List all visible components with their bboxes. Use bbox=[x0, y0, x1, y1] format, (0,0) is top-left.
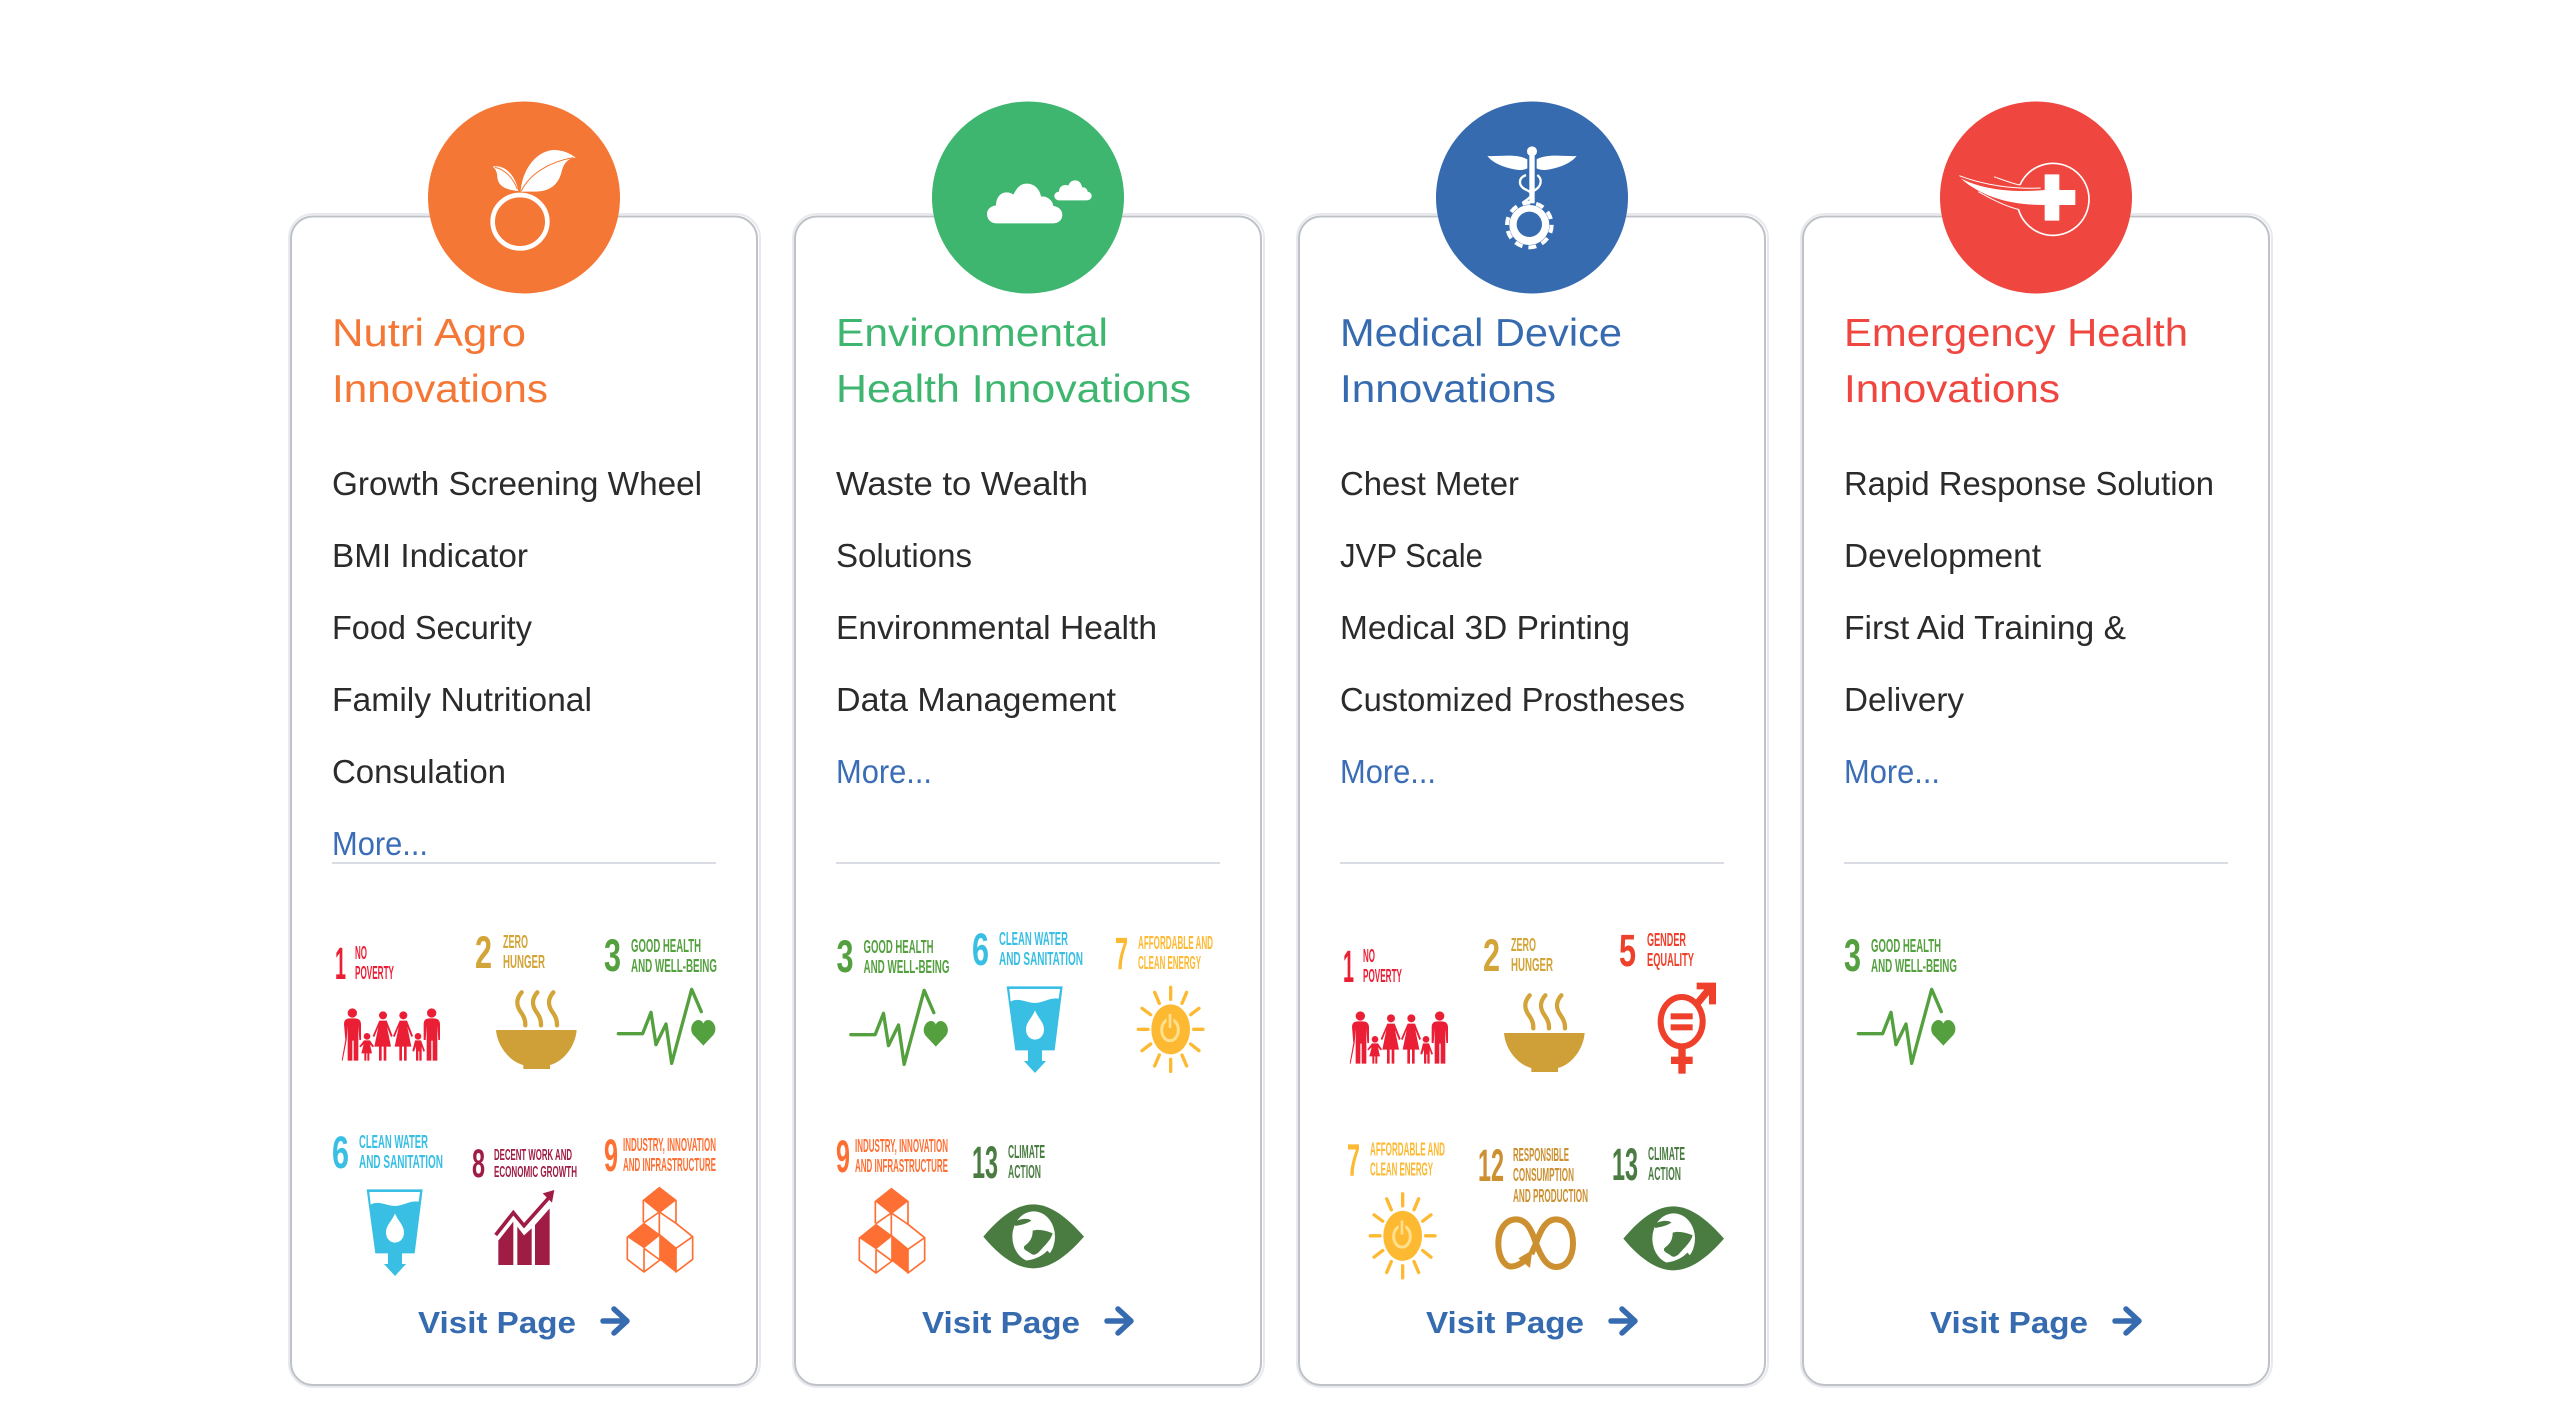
goal: 6 clean water: 6 bbox=[972, 924, 989, 975]
icon: medical cross bbox=[1940, 102, 2132, 294]
link: visit page: Visit Page bbox=[1426, 1305, 1584, 1340]
goal: 1 no poverty: 1 bbox=[335, 938, 346, 989]
goal: 3 good health: GOOD HEALTH bbox=[631, 936, 701, 956]
panel: Medical Device Innovations: AND PRODUCTION bbox=[1513, 1186, 1588, 1206]
text block: items: Growth Screening Wheel bbox=[332, 465, 702, 502]
goal: 12 responsible consumption: 12 bbox=[1478, 1140, 1504, 1191]
goal: 3 good health: 3 bbox=[604, 930, 621, 981]
goal: 3 good health bbox=[604, 930, 717, 1063]
link: visit page: Visit Page bbox=[922, 1305, 1080, 1340]
goal: 5 gender equality bbox=[1619, 925, 1716, 1074]
text block: items: Waste to Wealth bbox=[836, 465, 1088, 502]
text block: items: Solutions bbox=[836, 537, 972, 574]
goal: 3 good health: AND WELL-BEING bbox=[631, 956, 717, 976]
panel: Environmental Health Innovations: AND INFRASTRUCTURE bbox=[855, 1156, 948, 1176]
goal: 2 zero hunger bbox=[1483, 930, 1585, 1072]
goal: 3 good health bbox=[836, 931, 950, 1064]
goal: 9 industry: 9 bbox=[836, 1131, 850, 1182]
panel: Emergency Health Innovations bbox=[1801, 102, 2272, 1387]
goal: 6 clean water: AND SANITATION bbox=[999, 949, 1083, 969]
goal: 3 good health: GOOD HEALTH bbox=[1871, 936, 1941, 956]
goal: 12 responsible consumption bbox=[1478, 1140, 1588, 1268]
panel: Environmental Health Innovations bbox=[793, 102, 1264, 1387]
link: more: More... bbox=[836, 753, 932, 790]
text block: items: Consulation bbox=[332, 753, 506, 790]
goal: 9 industry bbox=[604, 1130, 716, 1273]
heading: Innovations bbox=[1844, 368, 2060, 411]
goal: 8 decent work: DECENT WORK AND bbox=[494, 1147, 572, 1164]
panel: Nutri Agro Innovations bbox=[289, 102, 760, 1387]
goal: 3 good health: GOOD HEALTH bbox=[864, 937, 934, 957]
icon: leaf fruit bbox=[428, 102, 620, 294]
goal: 6 clean water: CLEAN WATER bbox=[359, 1132, 428, 1152]
text block: items bbox=[1844, 465, 2214, 718]
goal: 1 no poverty: NO bbox=[355, 943, 367, 963]
link: more: More... bbox=[1844, 753, 1940, 790]
goal: 6 clean water: CLEAN WATER bbox=[999, 929, 1068, 949]
text block: items: Development bbox=[1844, 537, 2041, 574]
goal: 6 clean water bbox=[332, 1127, 443, 1276]
link: more: More... bbox=[1340, 753, 1436, 790]
goal: 8 decent work: 8 bbox=[472, 1142, 485, 1186]
text block: items: Family Nutritional bbox=[332, 681, 592, 718]
goal: 13 climate action: CLIMATE bbox=[1008, 1142, 1045, 1162]
link: visit page: Visit Page bbox=[1930, 1305, 2088, 1340]
heading: Emergency Health bbox=[1844, 312, 2188, 355]
arrow bbox=[1107, 1309, 1131, 1333]
heading bbox=[332, 312, 548, 411]
link: visit page: Visit Page bbox=[418, 1305, 576, 1340]
goal: 1 no poverty: 1 bbox=[1343, 941, 1354, 992]
goal: 1 no poverty: POVERTY bbox=[355, 963, 394, 983]
heading bbox=[1340, 312, 1622, 411]
goal: 2 zero hunger: ZERO bbox=[1511, 935, 1536, 955]
goal: 3 good health: 3 bbox=[1844, 930, 1861, 981]
text block: items: JVP Scale bbox=[1340, 537, 1483, 574]
text block: items: Customized Prostheses bbox=[1340, 681, 1685, 718]
goal: 13 climate action: CLIMATE bbox=[1648, 1144, 1685, 1164]
heading: Environmental bbox=[836, 312, 1108, 355]
icon: caduceus gear bbox=[1436, 102, 1628, 294]
goal: 13 climate action: 13 bbox=[972, 1137, 998, 1188]
goal: 13 climate action: ACTION bbox=[1648, 1164, 1681, 1184]
goal: 13 climate action: ACTION bbox=[1008, 1162, 1041, 1182]
heading: Innovations bbox=[1340, 368, 1556, 411]
goal: 3 good health: AND WELL-BEING bbox=[864, 957, 950, 977]
goal: 13 climate action bbox=[1612, 1139, 1724, 1270]
goal: 2 zero hunger: ZERO bbox=[503, 932, 528, 952]
goal: 6 clean water: AND SANITATION bbox=[359, 1152, 443, 1172]
goal: 1 no poverty: POVERTY bbox=[1363, 966, 1402, 986]
text block: items bbox=[332, 465, 702, 790]
goal: 2 zero hunger bbox=[475, 927, 577, 1069]
heading: Health Innovations bbox=[836, 368, 1191, 411]
goal: 7 affordable energy: 7 bbox=[1347, 1134, 1360, 1186]
goal: 6 clean water bbox=[972, 924, 1083, 1073]
goal: 3 good health bbox=[1844, 930, 1957, 1063]
text block: items: Chest Meter bbox=[1340, 465, 1519, 502]
panel: Medical Device Innovations bbox=[1297, 102, 1768, 1387]
goal: 12 responsible consumption: CONSUMPTION bbox=[1513, 1165, 1574, 1185]
panel: Environmental Health Innovations: AFFORDABLE AND bbox=[1138, 933, 1213, 953]
text block: items: Environmental Health bbox=[836, 609, 1157, 646]
arrow bbox=[2115, 1309, 2139, 1333]
arrow bbox=[603, 1309, 627, 1333]
text block: items: BMI Indicator bbox=[332, 537, 528, 574]
text block: items: Medical 3D Printing bbox=[1340, 609, 1630, 646]
goal: 7 affordable energy: CLEAN ENERGY bbox=[1138, 953, 1201, 973]
goal: 9 industry bbox=[836, 1131, 948, 1274]
goal: 7 affordable energy bbox=[1115, 928, 1213, 1071]
text block: items: First Aid Training & bbox=[1844, 609, 2126, 646]
panel: Nutri Agro Innovations: AND INFRASTRUCTURE bbox=[623, 1155, 716, 1175]
goal: 8 decent work bbox=[472, 1142, 577, 1265]
goal: 5 gender equality: GENDER bbox=[1647, 930, 1686, 950]
text block: items bbox=[836, 465, 1157, 718]
goal: 1 no poverty: NO bbox=[1363, 946, 1375, 966]
goal: 6 clean water: 6 bbox=[332, 1127, 349, 1178]
panel: Medical Device Innovations: AFFORDABLE AND bbox=[1370, 1140, 1445, 1160]
icon: clouds bbox=[932, 102, 1124, 294]
goal: 5 gender equality: EQUALITY bbox=[1647, 950, 1694, 970]
goal: 1 no poverty bbox=[1343, 941, 1448, 1064]
goal: 3 good health: AND WELL-BEING bbox=[1871, 956, 1957, 976]
heading: Medical Device bbox=[1340, 312, 1622, 355]
link: more: More... bbox=[332, 825, 428, 862]
heading: Innovations bbox=[332, 368, 548, 411]
goal: 7 affordable energy: CLEAN ENERGY bbox=[1370, 1160, 1433, 1180]
goal: 2 zero hunger: HUNGER bbox=[503, 952, 545, 972]
heading bbox=[1844, 312, 2188, 411]
text block: items: Data Management bbox=[836, 681, 1116, 718]
goal: 2 zero hunger: 2 bbox=[475, 927, 492, 978]
goal: 9 industry: 9 bbox=[604, 1130, 618, 1181]
goal: 5 gender equality: 5 bbox=[1619, 925, 1636, 976]
goal: 7 affordable energy: 7 bbox=[1115, 928, 1128, 979]
heading: Nutri Agro bbox=[332, 312, 526, 355]
text block: items bbox=[1340, 465, 1685, 718]
text block: items: Rapid Response Solution bbox=[1844, 465, 2214, 502]
panel: Nutri Agro Innovations: INDUSTRY, INNOVATION bbox=[623, 1135, 716, 1155]
goal: 8 decent work: ECONOMIC GROWTH bbox=[494, 1164, 577, 1181]
goal: 2 zero hunger: HUNGER bbox=[1511, 955, 1553, 975]
goal: 7 affordable energy bbox=[1347, 1134, 1445, 1278]
panel: Environmental Health Innovations: INDUSTRY, INNOVATION bbox=[855, 1136, 948, 1156]
text block: items: Food Security bbox=[332, 609, 532, 646]
heading bbox=[836, 312, 1191, 411]
goal: 2 zero hunger: 2 bbox=[1483, 930, 1500, 981]
goal: 1 no poverty bbox=[335, 938, 440, 1061]
goal: 13 climate action bbox=[972, 1137, 1084, 1268]
arrow bbox=[1611, 1309, 1635, 1333]
text block: items: Delivery bbox=[1844, 681, 1964, 718]
goal: 12 responsible consumption: RESPONSIBLE bbox=[1513, 1145, 1569, 1165]
goal: 13 climate action: 13 bbox=[1612, 1139, 1638, 1190]
goal: 3 good health: 3 bbox=[836, 931, 854, 982]
